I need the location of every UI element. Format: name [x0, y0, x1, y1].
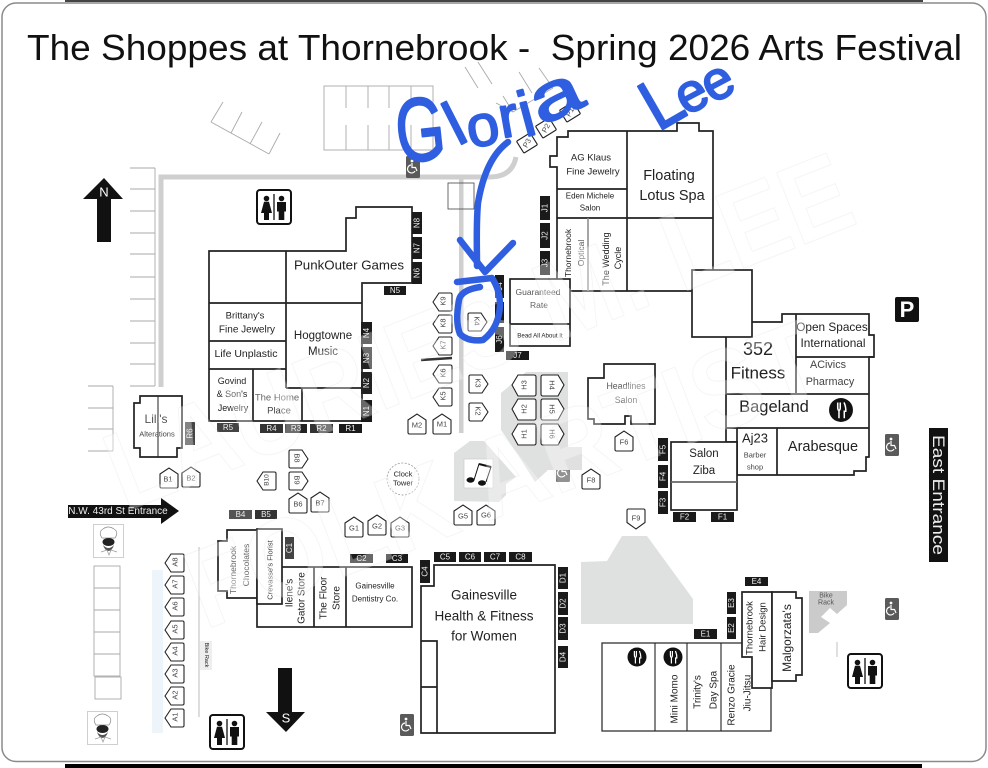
- shop labels: west wing: & Son's: [217, 389, 248, 399]
- kiosk tags: F and G: F9: [632, 514, 640, 522]
- kiosk tags: F and G: F8: [587, 476, 595, 484]
- shop labels: east wing: Fitness: [731, 364, 785, 382]
- building: Gainesville Health & Fitness: [421, 565, 555, 733]
- shop labels: southwest shops: The Floor: [318, 576, 330, 619]
- gray parking lot: [581, 536, 693, 624]
- shop labels: west wing: Jewelry: [218, 403, 249, 413]
- kiosk tags: K and M: K9: [438, 296, 448, 306]
- handwritten name: Gloria Lee: a: [516, 50, 594, 139]
- building: Guaranteed Rate: [510, 279, 570, 346]
- shop labels: north wing: Thornebrook: [563, 228, 573, 277]
- booth tags: D: D4: [558, 651, 568, 662]
- booth tags: E: E3: [727, 598, 736, 608]
- kiosk tags: K and M: K8: [438, 318, 448, 328]
- shop labels: southeast wing: Hair Design: [758, 602, 768, 652]
- booth tags: R: R6: [186, 428, 194, 439]
- icon: parking: P: [900, 297, 914, 322]
- watermark: [88, 128, 869, 652]
- shop labels: east wing: Bageland: [739, 398, 809, 416]
- shop labels: west wing: Fine Jewelry: [219, 324, 275, 336]
- east entrance label: East Entrance: [929, 435, 948, 555]
- shop labels: east wing: Barber: [744, 450, 767, 460]
- kiosk tags: A: [165, 554, 184, 727]
- kiosk tags: P: P2: [540, 122, 552, 134]
- kiosk tags: F and G: F6: [620, 438, 628, 446]
- kiosk tags: K and M: M1: [437, 420, 447, 428]
- shop labels: east wing: Arabesque: [788, 439, 858, 455]
- shop labels: west wing: Brittany's: [226, 310, 265, 322]
- shop labels: north wing: Cycle: [613, 247, 623, 269]
- kiosk tags: P: P3: [521, 137, 533, 149]
- kiosk tags: B: B7: [315, 498, 325, 508]
- booth tags: J: J4: [495, 282, 504, 291]
- booth tags: B4 B5 C: B5: [261, 510, 271, 519]
- west entrance arrow: N.W. 43rd St Entrance: [68, 506, 168, 517]
- booth tags: D: D1: [558, 572, 568, 583]
- building: east wing: [692, 270, 874, 475]
- shop labels: southeast wing: [670, 601, 794, 726]
- shop labels: north wing: AG Klaus: [571, 152, 611, 164]
- kiosk tags: H: H3: [520, 380, 528, 390]
- watermark: FOLK ARTIST: [169, 296, 839, 652]
- bike path marker: [152, 547, 837, 733]
- building: Lili's Alterations: Alterations: [139, 430, 175, 438]
- kiosk tags: H: H4: [548, 380, 556, 390]
- shop labels: southwest shops: Ilene's: [284, 579, 296, 607]
- west entrance arrow: [68, 498, 179, 524]
- icon: dining Bageland: [829, 398, 853, 422]
- kiosk tags: K and M: K7: [438, 340, 448, 350]
- kiosk tags: B: B2: [186, 474, 196, 482]
- icons: dining southeast: [628, 648, 682, 666]
- building: west wing: [209, 207, 412, 421]
- kiosk tags: F and G: [345, 431, 645, 537]
- shop labels: east wing: shop: [747, 462, 763, 472]
- icon: chef logos: [88, 524, 124, 744]
- booth tags: D: [558, 567, 568, 668]
- booth tags: B4 B5 C: C5: [440, 552, 451, 562]
- shop labels: east wing: ACivics: [810, 359, 847, 371]
- building: Salon Ziba: Ziba: [693, 465, 716, 477]
- booth tags: E: [694, 577, 768, 639]
- handwritten name: Gloria Lee: e: [689, 48, 744, 115]
- booth tags: B4 B5 C: C3: [392, 554, 403, 563]
- booth tags: B4 B5 C: C6: [465, 552, 476, 562]
- kiosk tags: F and G: G3: [395, 524, 405, 532]
- handwritten name: Gloria Lee: i: [510, 77, 542, 151]
- booth tags: F: F3: [658, 497, 668, 507]
- shop labels: southwest shops: Gator Store: [296, 572, 308, 624]
- kiosk tags: K and M: K6: [438, 368, 448, 378]
- building: Guaranteed Rate: Guaranteed: [516, 287, 561, 297]
- icon: restroom southeast: [848, 654, 882, 688]
- handwritten name: Gloria Lee: G: [391, 78, 450, 183]
- clock tower: [387, 463, 419, 495]
- shop labels: southwest shops: Thornebrook: [228, 545, 238, 594]
- clock tower: Tower: [393, 478, 414, 488]
- booth tags: R: R1: [345, 424, 356, 433]
- booth tags: N: N4: [362, 327, 371, 338]
- booth tags: N: N1: [362, 405, 371, 416]
- kiosk tags: B: B1: [163, 474, 173, 484]
- kiosk tags: F and G: G1: [349, 524, 359, 532]
- handwritten name: Gloria Lee: o: [461, 91, 504, 161]
- booth tags: N: [361, 212, 422, 422]
- icon: music notes: [464, 459, 493, 488]
- shop labels: west wing: Life Unplastic: [214, 348, 278, 360]
- booth tags: E: E1: [701, 630, 711, 638]
- shop labels: west wing: Hoggtowne: [294, 330, 352, 342]
- kiosk tags: K and M: K5: [438, 391, 448, 401]
- shop labels: southeast wing: Trinity's: [692, 675, 704, 709]
- parking lots: [88, 62, 553, 699]
- kiosk tags: F and G: G6: [481, 510, 491, 520]
- kiosk tags: A: A2: [170, 690, 180, 700]
- building: Gainesville Health & Fitness: Gainesville: [451, 588, 517, 602]
- building: Headlines Salon: [588, 364, 655, 424]
- booth tags: F: F2: [680, 512, 690, 522]
- shop labels: east wing: 352: [743, 339, 773, 359]
- booth tags: J: [495, 196, 550, 360]
- shop labels: southwest shops: Dentistry Co.: [352, 594, 398, 604]
- building: Gainesville Health & Fitness: Health & Fitness: [434, 608, 534, 624]
- shop labels: north wing: Floating: [643, 168, 695, 184]
- kiosk tags: A: A7: [170, 579, 180, 589]
- gray plaza: H row: [501, 372, 582, 482]
- shop labels: southwest shops: Crevasse's Florist: [266, 539, 274, 600]
- shop labels: southeast wing: Mini Momo: [670, 674, 680, 723]
- kiosk tags: A: A3: [170, 668, 180, 678]
- building: Gainesville Health & Fitness: for Women: [451, 628, 517, 644]
- booth tags: J: J7: [513, 351, 522, 360]
- icon: accessible parking markers: [400, 156, 899, 736]
- kiosk tags: H: H2: [520, 404, 528, 414]
- booth tags: J: J2: [540, 231, 550, 240]
- booth tags: B4 B5 C: C8: [515, 552, 526, 562]
- shop labels: east wing: Aj23: [742, 430, 768, 446]
- booth tags: F: [658, 438, 734, 522]
- bike path marker: Bike Rack: [203, 643, 209, 668]
- booth tags: D: D3: [558, 623, 568, 634]
- shop labels: east wing: International: [801, 336, 865, 350]
- watermark: LAURIES M. LEE: [88, 128, 869, 534]
- kiosk tags: B: B9: [292, 475, 302, 485]
- booth tags: J: J6: [495, 335, 504, 344]
- shop labels: southwest shops: Store: [332, 586, 342, 610]
- shop labels: southwest shops: Gainesville: [355, 582, 395, 590]
- shop labels: southeast wing: Thornebrook: [744, 601, 756, 655]
- booth tags: B4 B5 C: [229, 510, 532, 583]
- shop labels: southeast wing: Malgorzata's: [780, 604, 794, 672]
- building: southeast wing: [602, 592, 802, 731]
- booth tags: J: J1: [540, 203, 550, 212]
- shop labels: southeast wing: Day Spa: [708, 670, 720, 709]
- booth tags: J: J3: [540, 258, 550, 267]
- kiosk tags: K and M: K2: [474, 406, 482, 416]
- building: Guaranteed Rate: Bead All About It: [517, 332, 563, 340]
- building: Salon Ziba: [671, 442, 737, 510]
- arrow: pointing to booth K4: [460, 142, 513, 272]
- icon: restroom southwest: [210, 715, 244, 749]
- booth tags: F: F5: [658, 444, 668, 454]
- shop labels: north wing: Lotus Spa: [639, 188, 706, 204]
- north arrow: [83, 178, 123, 242]
- kiosk tags: A: A6: [170, 601, 180, 611]
- kiosk tags: A: A8: [170, 557, 180, 567]
- south arrow: S: [282, 710, 291, 726]
- shop labels: west wing: The Home: [255, 392, 299, 404]
- gray plaza: music: [454, 441, 516, 502]
- kiosk tags: A: A4: [170, 646, 180, 656]
- booth tags: B4 B5 C: C2: [356, 554, 367, 563]
- building: Headlines Salon: Salon: [615, 395, 637, 405]
- booth tags: R: R4: [266, 424, 277, 433]
- shop labels: west wing: PunkOuter Games: [294, 258, 404, 272]
- booth tags: F: F4: [658, 471, 668, 481]
- north arrow: N: [99, 184, 109, 200]
- roads: [161, 157, 516, 433]
- building: north wing: [550, 123, 713, 291]
- handwritten name: Gloria Lee: L: [625, 58, 697, 146]
- kiosk tags: P: [517, 102, 580, 153]
- booth tags: N: N7: [412, 242, 422, 253]
- building: Lili's Alterations: Lili's: [145, 412, 167, 426]
- building: Headlines Salon: Headlines: [606, 381, 646, 391]
- shop labels: east wing: Open Spaces: [796, 320, 868, 334]
- booth tags: B4 B5 C: C4: [420, 566, 430, 577]
- shop labels: north wing: Fine Jewelry: [566, 166, 620, 178]
- shop labels: west wing: Govind: [218, 376, 246, 386]
- title: The Shoppes at Thornebrook - Spring 2026 Arts Festival: [27, 27, 962, 68]
- kiosk tags: K and M: [408, 293, 488, 434]
- handwritten name: Gloria Lee: e: [663, 60, 718, 127]
- bike rack: Rack: [818, 600, 834, 606]
- kiosk tags: B: B8: [292, 453, 302, 463]
- booth tags: E: E2: [727, 623, 736, 633]
- kiosk tags: F and G: G2: [372, 522, 382, 530]
- booth tags: D: D2: [558, 598, 568, 609]
- building: Lili's Alterations: [134, 396, 182, 457]
- kiosk tags: K and M: K4: [472, 316, 482, 326]
- handwritten name: Gloria Lee: r: [493, 83, 523, 151]
- shop labels: west wing: Place: [267, 406, 291, 416]
- building: Salon Ziba: Salon: [689, 448, 719, 460]
- shop labels: southwest shops: [228, 539, 398, 624]
- booth tags: N: N8: [412, 217, 422, 228]
- booth tags: R: R5: [223, 423, 234, 432]
- icon: parking: [895, 297, 919, 322]
- kiosk tags: F and G: G5: [458, 512, 468, 520]
- booth tags: N: N2: [362, 377, 371, 388]
- booth tags: R: R2: [316, 424, 327, 433]
- handwritten name: Gloria Lee: [391, 48, 744, 183]
- clock tower: Clock: [394, 470, 413, 478]
- kiosk tags: K and M: K3: [474, 378, 482, 388]
- handwritten name: Gloria Lee: l: [433, 91, 477, 158]
- kiosk tags: A: A1: [170, 712, 180, 722]
- shop labels: southeast wing: Jiu-Jitsu: [742, 675, 754, 711]
- booth tags: N: N5: [390, 286, 401, 295]
- booth tags: R: R3: [291, 424, 302, 433]
- booth tags: F: F1: [718, 512, 728, 522]
- booth tags: B4 B5 C: B4: [236, 510, 246, 519]
- kiosk tags: H: H1: [520, 429, 528, 439]
- bike rack: Bike: [819, 592, 833, 600]
- shop labels: north wing: Optical: [576, 240, 586, 266]
- booth tags: B4 B5 C: C7: [490, 552, 501, 562]
- south arrow: [266, 668, 305, 732]
- booth tags: N: N6: [412, 267, 422, 278]
- shop labels: north wing: [563, 152, 706, 286]
- building: southwest shops: [218, 529, 412, 627]
- shop labels: north wing: The Wedding: [601, 232, 611, 286]
- shop labels: east wing: Pharmacy: [806, 376, 855, 388]
- kiosk tags: B: [160, 450, 329, 513]
- shop labels: west wing: Music: [308, 346, 338, 358]
- shop labels: west wing: [214, 258, 404, 416]
- circle: around booth K4: [457, 278, 500, 340]
- kiosk tags: A: A5: [170, 624, 180, 634]
- kiosk tags: H: H6: [548, 429, 556, 439]
- shop labels: southwest shops: Chocolates: [241, 544, 251, 586]
- kiosk tags: K and M: M2: [412, 420, 422, 430]
- building: Guaranteed Rate: Rate: [530, 300, 548, 310]
- booth tags: R: [185, 422, 362, 445]
- booth tags: E: E4: [752, 577, 762, 586]
- kiosk tags: B: B10: [264, 474, 270, 486]
- booth tags: B4 B5 C: C1: [285, 542, 294, 553]
- bike rack: [809, 591, 847, 633]
- kiosk tags: B: B6: [293, 500, 303, 508]
- booth tags: N: N3: [362, 352, 371, 363]
- shop labels: southeast wing: Renzo Gracie: [726, 664, 738, 726]
- shop labels: east wing: [731, 320, 868, 472]
- kiosk tags: H: H5: [548, 404, 556, 414]
- icon: restroom north: [257, 190, 291, 224]
- kiosk tags: H: [512, 375, 564, 445]
- shop labels: north wing: Salon: [580, 204, 600, 212]
- shop labels: north wing: Eden Michele: [566, 192, 615, 200]
- kiosk tags: P: P1: [564, 106, 576, 118]
